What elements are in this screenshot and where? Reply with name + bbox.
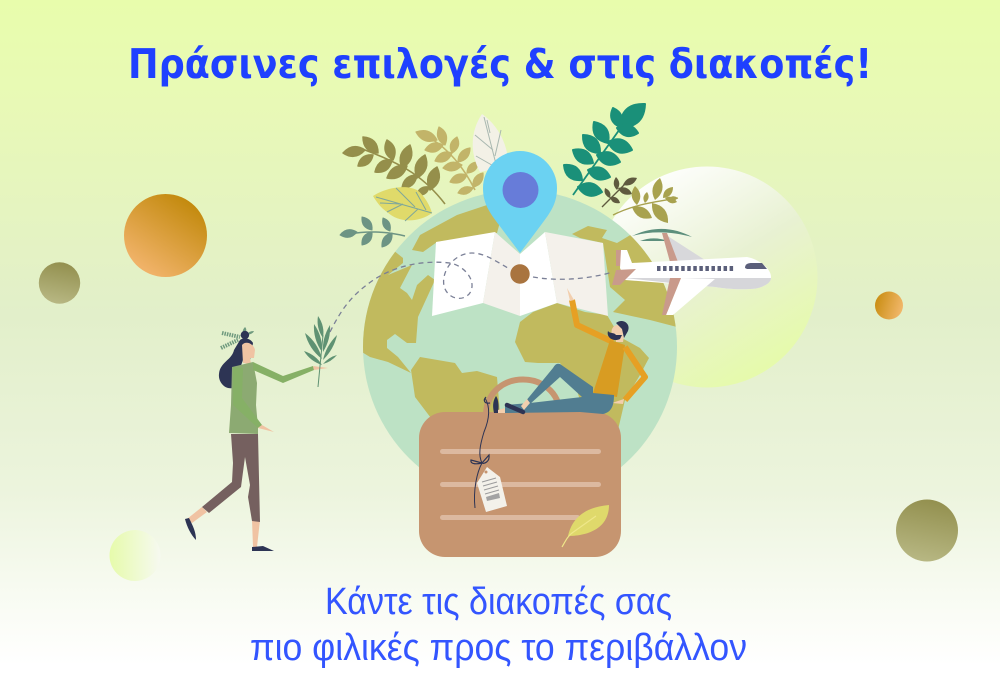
decorative circle: pale large behind plane: [596, 166, 818, 388]
branch: tan: [416, 127, 483, 194]
extended arm: [253, 362, 314, 383]
continents: [350, 205, 690, 430]
subtitle line 2: πιο φιλικές προς το περιβάλλον: [250, 627, 747, 669]
shoes: [185, 518, 196, 540]
hair plants: [221, 333, 240, 348]
branch: dark olive: [343, 137, 445, 204]
decorative circle: olive small: [39, 262, 80, 304]
case body: [419, 412, 621, 557]
branch: olive: [613, 178, 678, 223]
decorative circle: olive large: [896, 500, 958, 562]
woman holding a plant: [185, 316, 337, 551]
legs: [505, 364, 614, 414]
plant in hand: [304, 316, 337, 387]
decorative circle: orange large: [124, 194, 207, 277]
near arm: [233, 367, 262, 428]
branch: dark brown: [602, 177, 637, 207]
suitcase: [419, 380, 621, 557]
branch: grey teal: [340, 217, 405, 247]
decorative circle: orange small: [875, 292, 903, 320]
handle: [486, 380, 560, 414]
tail leaves behind plane: [632, 229, 692, 241]
torso: [593, 340, 625, 397]
subtitle line 1: Κάντε τις διακοπές σας: [325, 581, 672, 623]
man sitting on suitcase: [493, 288, 645, 414]
windows: [657, 266, 735, 271]
map: [432, 232, 608, 316]
fuselage: [620, 250, 771, 289]
cockpit: [745, 263, 767, 269]
head: [608, 321, 629, 342]
legs skin: [187, 507, 207, 523]
near arm: [625, 347, 645, 400]
raised arm: [572, 300, 613, 342]
decorative circle: pale small: [110, 530, 160, 581]
shoes: [507, 405, 523, 412]
luggage tag: [471, 397, 507, 512]
map hub marker: [510, 264, 530, 284]
title: Πράσινες επιλογές & στις διακοπές!: [128, 40, 872, 88]
tail fin: [616, 250, 621, 266]
globe: [363, 194, 677, 467]
airplane: [612, 229, 771, 315]
hands: [313, 366, 328, 370]
icon: location pin: [483, 151, 557, 253]
leaf: yellow veined: [373, 187, 432, 221]
back arm and hair: [241, 331, 249, 339]
subtitle: [250, 581, 747, 669]
plants behind the globe: [340, 104, 678, 247]
sweater: [229, 362, 258, 434]
face: [242, 343, 255, 364]
far wing: [663, 233, 705, 262]
straps: [440, 449, 601, 454]
map panel 3: [520, 232, 557, 316]
pants: [202, 434, 260, 522]
map panel 1: [432, 232, 495, 316]
stabilizer: [612, 269, 636, 285]
globe ocean: [363, 190, 677, 504]
map panel 2: [483, 232, 520, 316]
map panel 4: [545, 232, 608, 316]
dashed flight route: [330, 253, 613, 332]
branch: teal: [564, 104, 645, 196]
leaf on suitcase: [568, 505, 609, 536]
leaf: pale veined: [473, 114, 508, 172]
near wing: [666, 278, 715, 315]
